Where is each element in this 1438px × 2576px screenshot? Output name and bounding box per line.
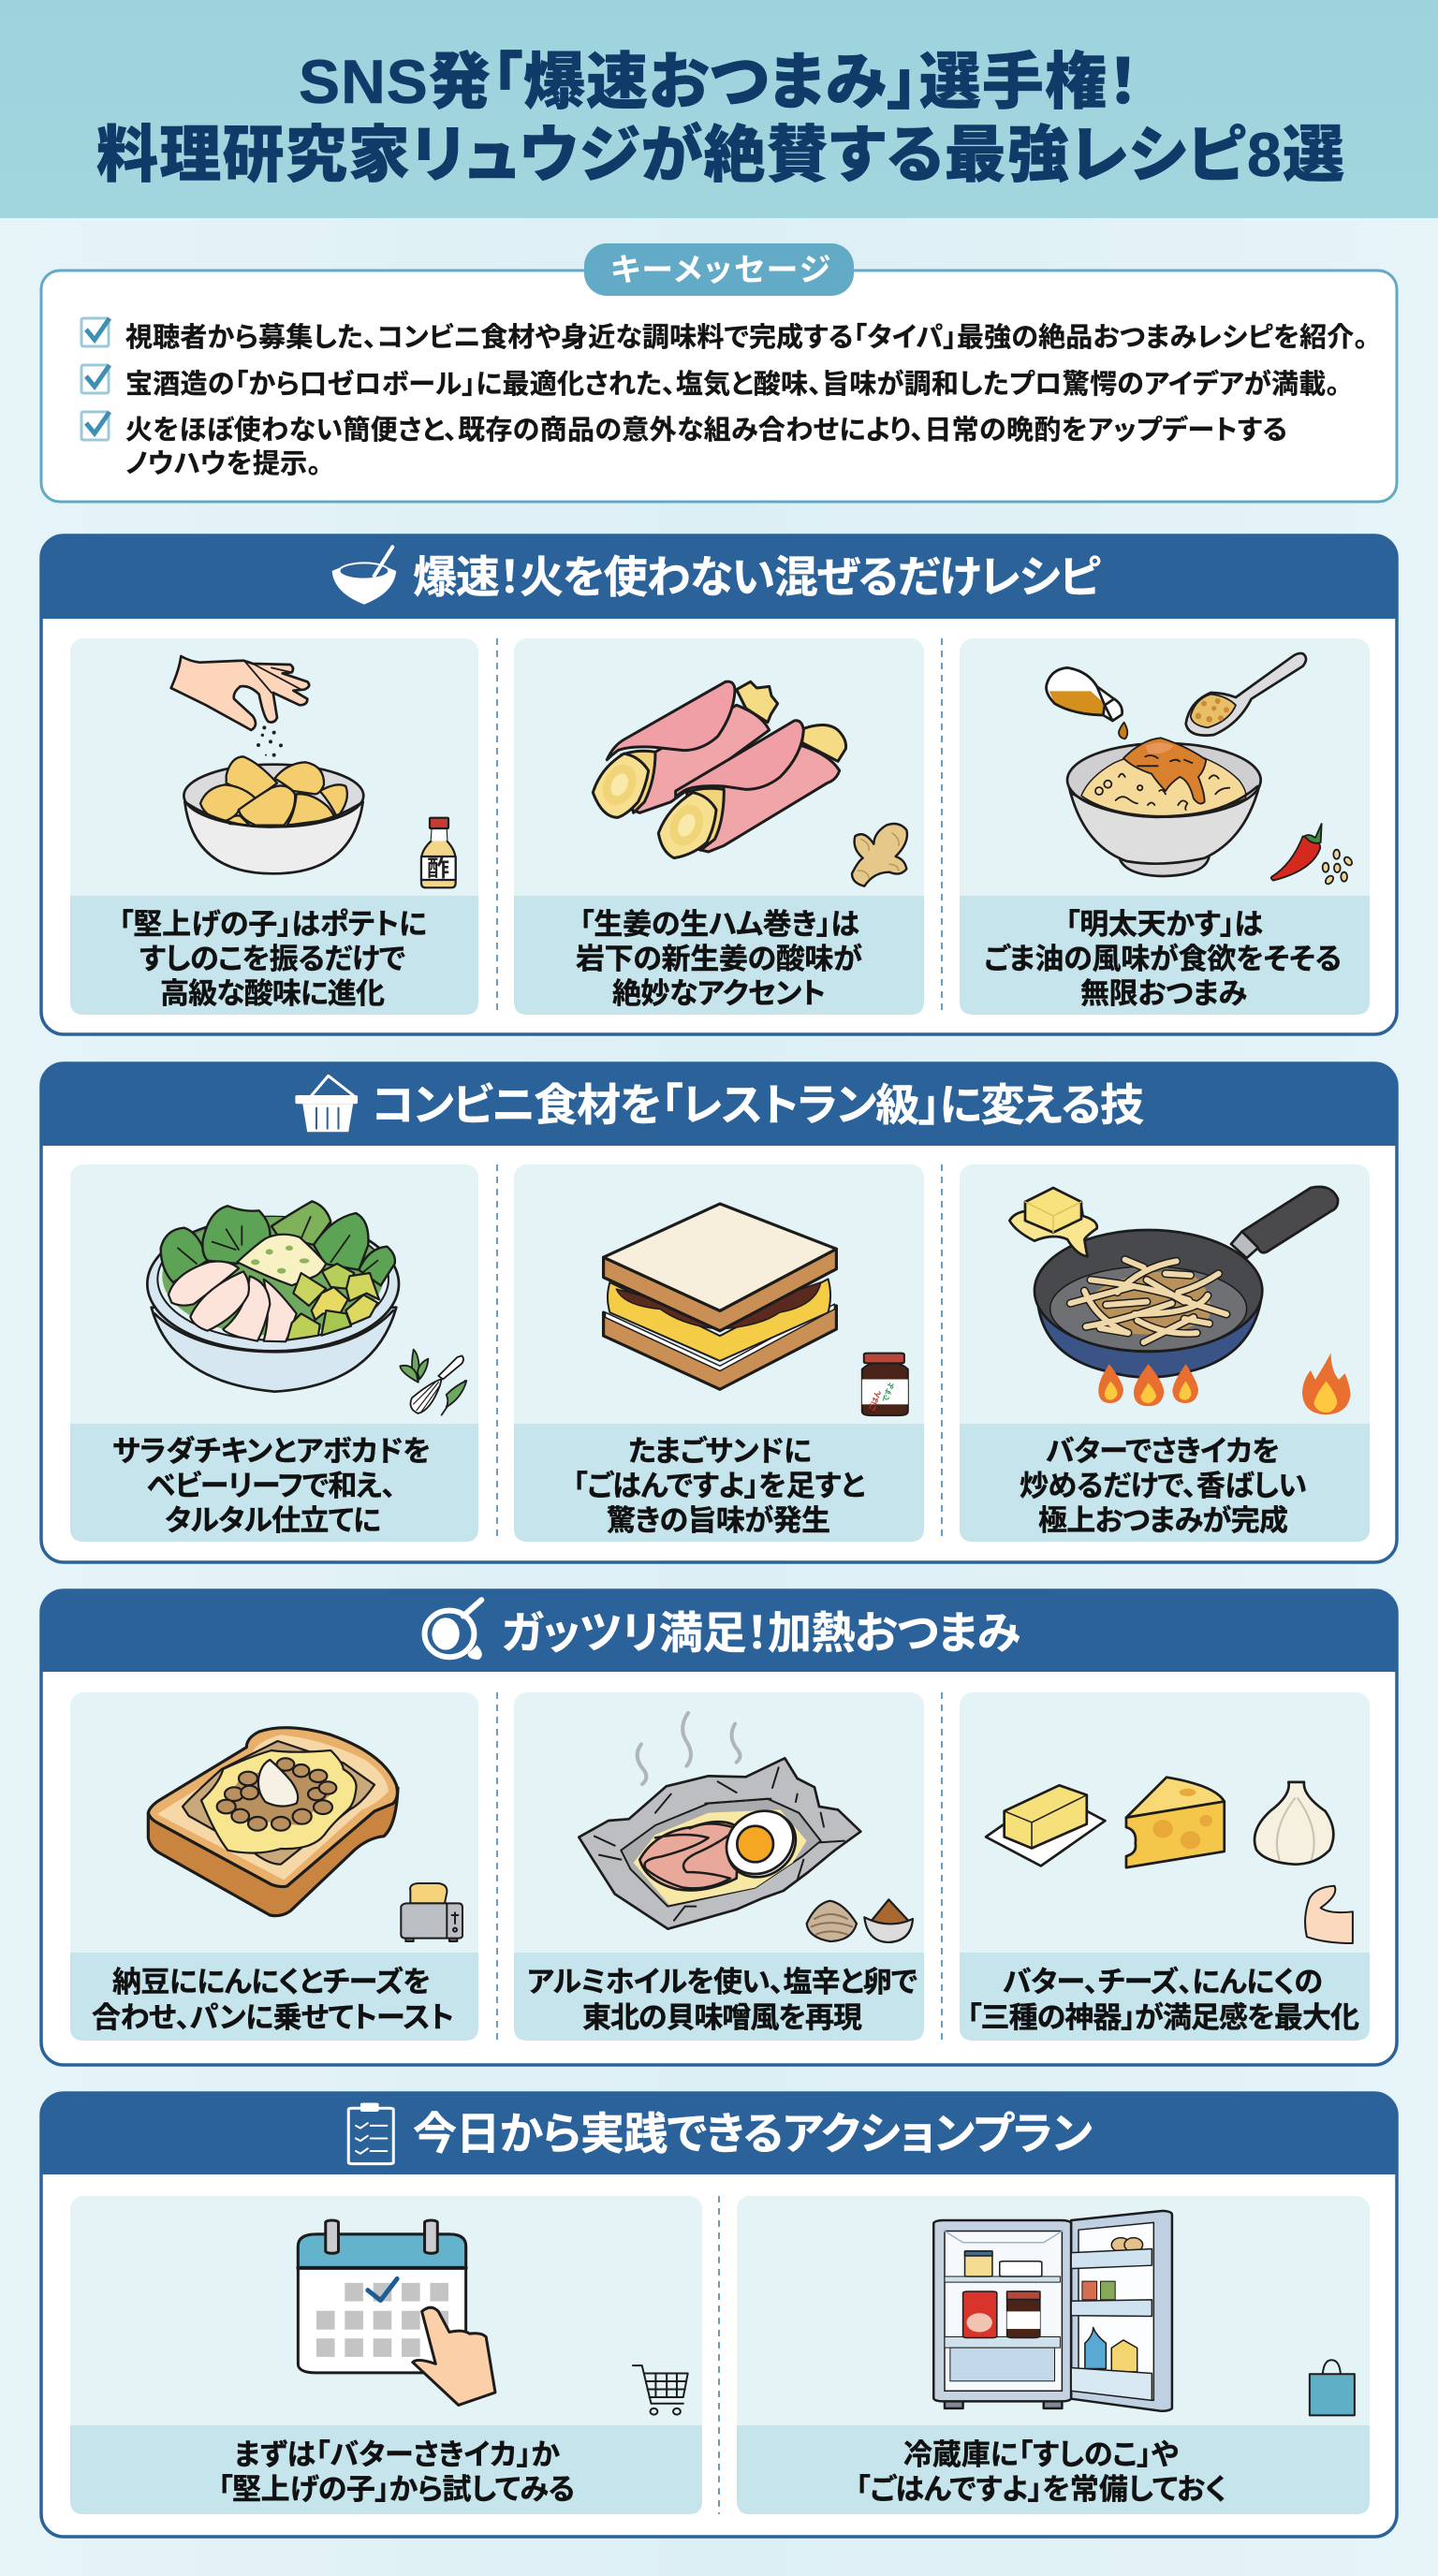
caption: ごま油の風味が食欲をそそる [984,943,1342,975]
card: mentai tenkasu [960,638,1370,1015]
card: stock the fridge [737,2196,1370,2514]
checkbox 2 [81,365,110,393]
caption [576,908,862,1010]
illustration: calendar and pointing hand [298,2220,495,2405]
caption [856,2438,1226,2506]
icon: chili and sesame [1271,824,1354,886]
bullet 3: 火をほぼ使わない簡便さと、既存の商品の意外な組み合わせにより、日常の晩酌をアップデートする [125,414,1287,446]
illustration: hand sprinkling over potato bowl [171,656,363,873]
illustration: chicken avocado salad bowl [147,1201,399,1392]
heading: ガッツリ満足！加熱おつまみ [502,1608,1020,1658]
illustration: natto cheese toast [148,1728,398,1916]
title line 2: 料理研究家リュウジが絶賛する最強レシピ8選 [96,120,1344,189]
card: three treasures [960,1692,1370,2041]
caption [984,908,1342,1010]
bullet 3: ノウハウを提示。 [125,448,321,479]
icon: flexed arm [1305,1886,1353,1943]
card: potato [70,638,478,1015]
card: salad [70,1164,478,1542]
card: try first [70,2196,702,2514]
icon: vinegar bottle [421,818,456,887]
panel: section 4 action plan [41,2093,1397,2537]
icon: clam and miso [807,1899,913,1942]
caption: 絶妙なアクセント [612,977,826,1010]
caption [112,1435,431,1537]
bullet 3 [125,414,1287,479]
caption: 驚きの旨味が発生 [607,1504,830,1537]
caption: まずは「バターさきイカ」か [234,2438,560,2471]
heading: 爆速！火を使わない混ぜるだけレシピ [413,552,1101,602]
pill label: key message: キーメッセージ [610,253,830,288]
checkbox 1 [81,318,110,346]
caption: 「明太天かす」は [1065,908,1263,941]
caption: 納豆ににんにくとチーズを [112,1966,431,1998]
caption: 極上おつまみが完成 [1038,1504,1288,1537]
caption: 合わせ、パンに乗せてトースト [92,2001,454,2034]
caption [527,1966,917,2034]
icon: rice seasoning jar: ですよ [881,1382,896,1403]
card: ginger ham rolls [514,638,924,1015]
icon: rice seasoning jar [862,1354,908,1415]
panel: section 3 hot snacks [41,1590,1397,2065]
illustration: open refrigerator [933,2211,1172,2411]
icon: shopping basket [295,1076,358,1132]
card: natto toast [70,1692,478,2041]
caption [92,1966,454,2034]
card: butter squid [960,1164,1370,1542]
icon: bowl and spoon [332,547,396,605]
illustration: rice bowl, oil bottle and spoon [1047,653,1306,876]
caption: 「三種の神器」が満足感を最大化 [967,2001,1359,2034]
caption: 東北の貝味噌風を再現 [582,2001,862,2034]
heading: 今日から実践できるアクションプラン [413,2109,1093,2159]
caption: 「堅上げの子」はポテトに [119,908,427,941]
icon: checklist clipboard [348,2102,393,2164]
title line 1: SNS発「爆速おつまみ」選手権！ [299,47,1138,116]
illustration: ham rolls with ginger [593,681,846,858]
caption [218,2438,575,2506]
section header bar [41,2093,1397,2174]
caption: すしのこを振るだけで [139,943,405,975]
illustration: frying pan with squid [1009,1187,1350,1414]
caption [119,908,427,1010]
caption: 高級な酸味に進化 [160,977,385,1010]
panel: section 2 convenience store [41,1063,1397,1562]
icon: pan and flame [425,1600,482,1660]
panel: key message [41,243,1397,502]
icon: shopping cart [633,2365,688,2415]
caption: 岩下の新生姜の酸味が [576,943,862,975]
icon: rice seasoning jar: ごはん [867,1389,883,1412]
bullet 1: 視聴者から募集した、コンビニ食材や身近な調味料で完成する「タイパ」最強の絶品おつまみレシピを紹介。 [125,322,1368,353]
heading: コンビニ食材を「レストラン級」に変える技 [372,1080,1144,1130]
caption: サラダチキンとアボカドを [112,1435,431,1468]
icon: toaster [401,1883,462,1941]
card: egg sandwich [514,1164,924,1542]
caption [967,1966,1359,2034]
illustration: foil with egg and shiokara [579,1713,860,1929]
icon: shopping bag [1310,2360,1355,2415]
checkbox 3 [81,412,110,440]
section header bar [41,535,1397,619]
caption [1020,1435,1307,1537]
caption: 「生姜の生ハム巻き」は [580,908,859,941]
caption: ベビーリーフで和え、 [147,1470,396,1502]
section header bar [41,1063,1397,1146]
caption: たまごサンドに [628,1435,812,1468]
title banner [0,0,1438,218]
panel: section 1 no-fire recipes [41,535,1397,1034]
section header bar [41,1590,1397,1672]
caption: バター、チーズ、にんにくの [1003,1966,1323,1998]
card: foil [514,1692,924,2041]
caption: 無限おつまみ [1080,977,1247,1010]
caption: 炒めるだけで、香ばしい [1020,1470,1307,1502]
bullet 2: 宝酒造の「から口ゼロボール」に最適化された、塩気と酸味、旨味が調和したプロ驚愕のアイデアが満載。 [125,368,1340,400]
icon: ginger root [852,824,907,886]
caption: バターでさきイカを [1046,1435,1280,1468]
caption: 「ごはんですよ」を足すと [573,1470,865,1502]
caption: タルタル仕立てに [165,1504,381,1537]
illustration: butter cheese garlic [986,1778,1333,1867]
illustration: egg sandwich [604,1204,836,1389]
icon: whisk and herbs [400,1350,466,1415]
caption: 「堅上げの子」から試してみる [218,2473,575,2506]
caption: アルミホイルを使い、塩辛と卵で [527,1966,917,1998]
icon: vinegar bottle: 酢 [427,856,449,882]
pill label: key message [584,243,854,296]
caption: 冷蔵庫に「すしのこ」や [903,2438,1179,2471]
caption: 「ごはんですよ」を常備しておく [856,2473,1226,2506]
caption [573,1435,865,1537]
